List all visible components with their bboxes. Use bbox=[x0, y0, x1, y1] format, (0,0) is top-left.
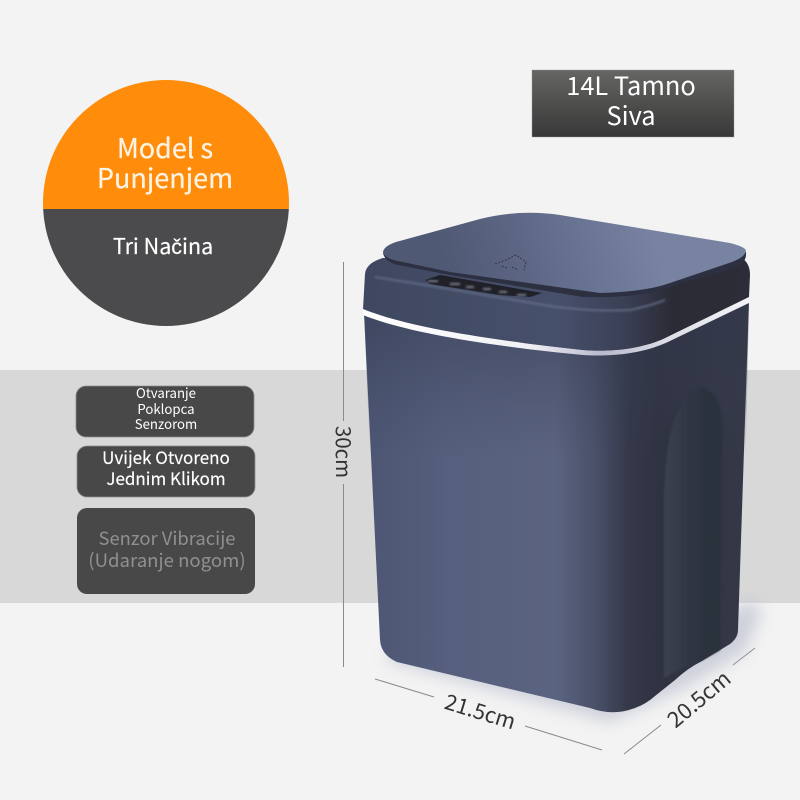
height dimension: 30cm bbox=[330, 426, 360, 478]
width dimension: 21.5cm bbox=[441, 685, 520, 736]
circle title: Model s bbox=[117, 127, 213, 166]
mode button: one click: Uvijek Otvoreno bbox=[102, 444, 230, 469]
colour label: Siva bbox=[606, 97, 656, 133]
side handle recess bbox=[664, 387, 722, 678]
trash can bbox=[363, 213, 762, 722]
colour label bbox=[532, 67, 734, 137]
can body bbox=[364, 300, 749, 712]
collar bbox=[363, 257, 750, 351]
white ring bbox=[363, 297, 749, 356]
badge: model circle bbox=[43, 80, 289, 326]
mode button: vibration sensor bbox=[77, 508, 255, 594]
mode button: sensor: Senzorom bbox=[135, 414, 197, 433]
floor shadow bbox=[385, 600, 762, 722]
mode button: one click: Jednim Klikom bbox=[106, 465, 226, 490]
depth dimension: 20.5cm bbox=[659, 662, 737, 734]
depth dimension bbox=[624, 648, 755, 754]
lid side bbox=[383, 240, 746, 297]
control panel bbox=[425, 275, 542, 297]
circle subtitle: Punjenjem bbox=[97, 157, 233, 196]
mode button: sensor: Otvaranje bbox=[136, 383, 196, 402]
lid icon bbox=[495, 255, 526, 270]
width dimension bbox=[375, 679, 602, 750]
mode button: vibration sensor: Senzor Vibracije bbox=[99, 525, 235, 551]
colour label: 14L Tamno bbox=[566, 67, 696, 103]
mode button: one click bbox=[77, 444, 255, 497]
lid top bbox=[383, 213, 746, 293]
circle caption: Tri Načina bbox=[113, 230, 213, 261]
mode button: sensor: Poklopca bbox=[137, 399, 195, 418]
grey background band bbox=[0, 370, 800, 603]
mode button: sensor bbox=[76, 383, 254, 437]
collar highlight bbox=[375, 277, 665, 310]
mode button: vibration sensor: (Udaranje nogom) bbox=[88, 546, 246, 573]
